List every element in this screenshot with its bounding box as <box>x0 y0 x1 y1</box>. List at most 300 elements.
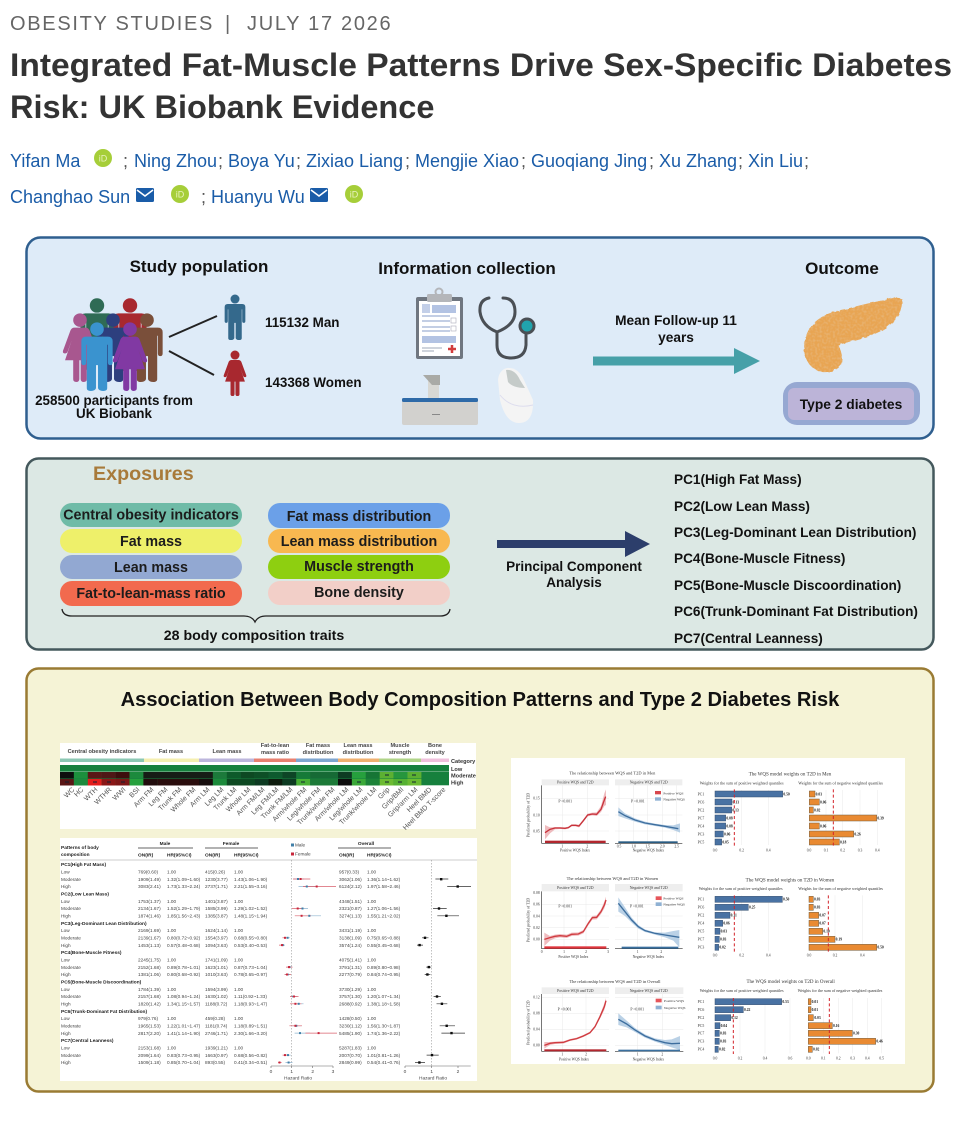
table rows: 0.55(0.45~0.68) <box>367 943 401 948</box>
table rows: 2152(1.68) <box>138 965 161 970</box>
table rows: 1939(1.21) <box>205 1046 228 1050</box>
table rows: PC4(Bone-Muscle Fitness) <box>61 950 122 956</box>
heatmap group headers: Lean mass <box>344 743 372 749</box>
chart: WQS curves in women: 2 <box>660 950 662 954</box>
follow-up label: Mean Follow-up 11 <box>615 313 737 328</box>
chart: WQS curves in men: 2.5 <box>674 844 679 848</box>
chart: weights in men: PC2 <box>698 808 704 812</box>
table rows: 1509(1.18) <box>138 1060 161 1065</box>
table rows: 2134(1.67) <box>138 906 161 911</box>
table header: HR(95%CI) <box>367 852 392 858</box>
heatmap column labels: Trunk FM/LM <box>260 786 295 821</box>
chart: weights overall: Weights for the sum of positive weighted quantiles <box>700 988 784 993</box>
heading: study population: Study population <box>130 257 268 276</box>
table rows: 1.00 <box>167 987 177 992</box>
chart: weights in women: 0.25 <box>749 906 756 910</box>
chart: weights overall: 0.04 <box>721 1024 727 1028</box>
authors: Xin Liu <box>748 151 803 171</box>
principal component list: PC1(High Fat Mass) <box>674 472 802 487</box>
chart: weights overall: 0.01 <box>812 1000 818 1004</box>
pills: left column <box>60 503 242 606</box>
chart: WQS curves in women: Positive WQS <box>663 897 683 901</box>
heatmap group headers: distribution <box>343 750 374 756</box>
table rows: 0.80(0.68~0.92) <box>167 972 201 977</box>
table rows: 1965(1.53) <box>138 1024 161 1028</box>
table rows: 1.00 <box>367 870 377 874</box>
table rows: 1.00 <box>167 958 177 962</box>
chart: WQS curves in women: Positive WQS and T2D <box>557 886 594 890</box>
chart: weights in men: 0.13 <box>733 800 739 804</box>
chart: weights in men: Weights for the sum of negative weighted quantiles <box>798 781 883 786</box>
participants label <box>35 393 193 421</box>
authors: Boya Yu <box>228 151 295 171</box>
chart: WQS curves in women: The relationship between WQS and T2D in Women <box>567 876 659 881</box>
table rows: 1784(1.39) <box>138 987 161 992</box>
table rows: 2.30(1.66~3.20) <box>234 1031 268 1036</box>
table rows: 1.74(1.36~2.22) <box>367 1031 401 1036</box>
chart: WQS curves in men: 0.15 <box>533 797 540 801</box>
chart: weights in men: 0.18 <box>840 840 847 844</box>
table rows: 2746(1.71) <box>205 1031 228 1036</box>
chart: weights in men: PC6 <box>698 800 704 804</box>
heatmap cells: ** <box>385 774 389 780</box>
chart: WQS curves in women: 0.06 <box>533 903 540 907</box>
journal line: OBESITY STUDIES <box>10 13 214 35</box>
chart: WQS curves overall: 0.12 <box>533 996 540 1000</box>
pills: right column: Lean mass distribution <box>281 534 437 550</box>
heatmap column labels: Grip/BMI <box>381 786 405 811</box>
chart: weights in women: 0.03 <box>814 898 821 902</box>
chart: WQS curves in women: P <0.001 <box>558 904 572 908</box>
table rows: 1623(1.01) <box>205 965 228 970</box>
table rows: Low <box>61 899 70 904</box>
chart: weights overall: PC5 <box>698 1024 704 1028</box>
heatmap group headers: distribution <box>303 750 334 756</box>
icon: clipboard <box>416 288 463 359</box>
table rows: 0.54(0.41~0.76) <box>367 1060 401 1065</box>
chart: weights in men: 0.06 <box>820 824 827 828</box>
chart: weights in women: PC4 <box>698 922 704 926</box>
chart: weights overall: 0.53 <box>782 1000 789 1004</box>
heatmap column labels: Leg/whole LM <box>329 786 365 822</box>
authors: Ning Zhou <box>134 151 217 171</box>
heatmap <box>60 743 476 832</box>
table rows: 0.87(0.73~1.04) <box>234 965 268 970</box>
chart: WQS curves in men: P <0.001 <box>558 800 572 804</box>
table rows: 1.00 <box>234 870 244 874</box>
chart: WQS curves in men: 1.0 <box>631 844 636 848</box>
table rows: 1630(1.02) <box>205 994 228 999</box>
table rows: 1554(3.97) <box>205 936 228 940</box>
chart: weights in men: 0.06 <box>820 800 827 804</box>
table rows: 5485(1.90) <box>339 1031 362 1036</box>
heatmap column labels: Arm FM/LM <box>236 786 267 817</box>
men count: 115132 Man <box>265 315 339 330</box>
chart: weights in women: 0.50 <box>783 898 790 902</box>
authors: Guoqiang Jing <box>531 151 647 171</box>
chart: WQS curves in women: 0.08 <box>533 891 540 895</box>
chart: weights in women: 0.11 <box>731 914 737 918</box>
chart: weights in women: 0.07 <box>819 914 826 918</box>
chart: weights overall: The WQS model weights on T2D in Overall <box>747 980 835 985</box>
table rows: High <box>61 1031 71 1036</box>
outcome box <box>783 382 920 425</box>
table rows <box>61 862 401 1065</box>
table rows: 1.11(0.92~1.33) <box>234 994 267 999</box>
chart: weights in women: 0.03 <box>814 906 821 910</box>
chart: weights in women: Weights for the sum of negative weighted quantiles <box>798 886 883 891</box>
table rows: 1820(1.42) <box>138 1002 161 1006</box>
title: Integrated Fat-Muscle Patterns Drive Sex-Specific Diabetes <box>10 47 952 83</box>
table rows: 2157(1.68) <box>138 994 161 999</box>
chart: WQS curves in men: 0.10 <box>533 813 540 817</box>
chart: weights in men: 0.0 <box>807 848 811 852</box>
table header: ON(IR) <box>138 852 154 858</box>
panel: study design <box>26 238 934 438</box>
table rows: 1.00 <box>234 958 244 962</box>
table rows: Moderate <box>61 965 81 970</box>
pills: right column: Bone density <box>314 585 404 601</box>
table rows: 4075(1.41) <box>339 958 362 962</box>
table rows: 1.32(1.09~1.60) <box>167 877 201 882</box>
row: overall <box>527 979 884 1061</box>
chart: weights overall: 0.30 <box>853 1032 860 1036</box>
authors: ; <box>296 151 301 171</box>
table rows: 1.00 <box>234 1016 244 1021</box>
chart: weights overall: 0.03 <box>814 1016 821 1020</box>
heatmap column labels <box>63 786 447 832</box>
chart: WQS curves overall <box>527 979 686 1061</box>
table rows: Moderate <box>61 877 81 882</box>
heatmap column labels: Leg FM <box>148 786 170 808</box>
pills: left column: Fat mass <box>120 534 182 550</box>
table rows: 1.55(1.21~2.02) <box>367 914 401 918</box>
chart: weights in men: 0.05 <box>722 840 729 844</box>
table rows: 1741(1.09) <box>205 958 228 962</box>
table rows: 3730(1.29) <box>339 987 362 992</box>
principal component list <box>674 472 918 646</box>
table rows: 1.00 <box>234 899 244 904</box>
chart: WQS curves overall: 2 <box>585 1052 587 1056</box>
table rows: High <box>61 972 71 977</box>
chart: weights in women: PC3 <box>698 946 704 950</box>
chart: WQS curves overall: Negative WQS and T2D <box>630 989 668 993</box>
table rows: 2.21(1.55~3.16) <box>234 884 268 889</box>
heatmap column labels: Trunk/whole LM <box>338 786 379 826</box>
table rows: 1874(1.46) <box>138 914 161 918</box>
panel: association <box>26 668 934 1092</box>
chart: WQS curves overall: Negative WQS <box>664 1006 686 1010</box>
table rows: 1594(3.99) <box>205 987 228 992</box>
authors: ; <box>405 151 410 171</box>
chart: weights in women: 0.06 <box>723 922 730 926</box>
chart: weights in women: 0.4 <box>860 954 865 958</box>
chart: weights in men: 0.26 <box>854 832 861 836</box>
table rows: High <box>61 1002 71 1006</box>
table rows: 1.18(0.93~1.47) <box>234 1002 268 1006</box>
table rows: 2169(1.69) <box>138 928 161 933</box>
arrow: follow-up <box>593 348 760 374</box>
table rows: 1.00 <box>234 1046 244 1050</box>
forest plot: male and female: 3 <box>332 1069 335 1075</box>
principal component list: PC2(Low Lean Mass) <box>674 499 810 514</box>
chart: weights in men: 0.08 <box>726 824 733 828</box>
table rows: 1.00 <box>367 928 377 933</box>
table rows: 459(0.28) <box>205 1016 226 1021</box>
icon: pancreas <box>804 298 902 372</box>
table rows: 1.00 <box>367 987 377 992</box>
table rows: Low <box>61 928 70 933</box>
chart: WQS curves in women: Negative WQS <box>663 903 685 907</box>
table header: Male <box>160 841 171 847</box>
pills: right column: Fat mass distribution <box>287 509 431 525</box>
chart: weights in women: 0.2 <box>739 954 744 958</box>
table rows: 2321(0.87) <box>339 906 362 911</box>
chart: weights in men: 0.50 <box>783 792 790 796</box>
chart: WQS curves in women: 1 <box>637 950 639 954</box>
traits label: 28 body composition traits <box>164 628 344 644</box>
chart: WQS curves in men: 2 <box>586 844 588 848</box>
chart: weights in women: 0.03 <box>721 930 727 934</box>
forest plot table <box>60 838 477 1082</box>
table rows: 1401(3.87) <box>205 899 228 904</box>
table rows: 2153(1.68) <box>138 1046 161 1050</box>
authors: Mengjie Xiao <box>415 151 519 171</box>
chart: weights overall: PC3 <box>698 1040 704 1044</box>
table rows: High <box>61 943 71 948</box>
chart: WQS curves in women: 1 <box>563 950 565 954</box>
follow-up label <box>615 313 737 345</box>
chart: weights overall: PC6 <box>698 1008 704 1012</box>
table rows: 0.89(0.78~1.01) <box>167 965 201 970</box>
forest plot: male and female <box>270 860 337 1082</box>
forest plot: overall: Hazard Ratio <box>419 1076 447 1082</box>
forest plot: male and female: 2 <box>311 1069 314 1075</box>
icon: heel scanner <box>498 368 533 423</box>
forest plot: male and female: Hazard Ratio <box>284 1076 312 1082</box>
PCA label <box>506 559 642 590</box>
heatmap row labels <box>451 759 476 786</box>
chart: weights in men: 0.03 <box>816 792 822 796</box>
pills: left column: Lean mass <box>114 560 188 576</box>
table rows: 957(0.33) <box>339 870 360 874</box>
table rows: Low <box>61 870 70 874</box>
table rows: 3274(1.13) <box>339 914 362 918</box>
outcome box: Type 2 diabetes <box>800 397 903 412</box>
heatmap cells <box>60 765 449 787</box>
table rows: 0.41(0.34~0.51) <box>234 1060 268 1065</box>
table rows: 3791(1.31) <box>339 965 362 970</box>
chart: weights in men: The WQS model weights on T2D in Men <box>749 772 832 777</box>
chart: WQS curves overall: 1 <box>637 1052 639 1056</box>
principal component list: PC7(Central Leanness) <box>674 631 823 646</box>
chart: WQS curves in men: 0.05 <box>533 829 540 833</box>
heatmap column labels: Whole LM <box>225 786 253 814</box>
chart: WQS curves in men: Positive WQS <box>663 791 683 795</box>
PCA label: Analysis <box>546 575 602 590</box>
table rows: 3431(1.19) <box>339 928 362 933</box>
table header: composition <box>61 852 90 858</box>
chart: weights in women: 0.2 <box>833 954 837 958</box>
table rows: 1.18(0.89~1.51) <box>234 1024 268 1028</box>
authors: ; <box>804 151 809 171</box>
table rows: PC2(Low Lean Mass) <box>61 892 109 898</box>
table rows: 1.22(1.01~1.47) <box>167 1024 201 1028</box>
table rows: 0.80(0.72~0.92) <box>167 936 201 940</box>
chart: WQS curves in women: P <0.001 <box>630 904 644 908</box>
icon: mail <box>136 188 154 202</box>
heatmap column labels: WC <box>63 786 76 800</box>
chart: WQS curves in men: 1 <box>561 844 563 848</box>
table header <box>60 841 477 860</box>
table header: Female <box>223 841 240 847</box>
chart: weights in men: 0.13 <box>732 808 739 812</box>
table rows: 1.01(0.81~1.26) <box>367 1053 401 1058</box>
principal component list: PC3(Leg-Dominant Lean Distribution) <box>674 525 916 540</box>
chart: weights overall: 0.4 <box>763 1056 767 1060</box>
heatmap column labels: Trunk FM <box>157 786 184 812</box>
table rows: 3230(1.12) <box>339 1024 362 1028</box>
chart: weights in women: PC1 <box>698 898 704 902</box>
chart: weights in women: 0.0 <box>713 954 717 958</box>
heatmap group headers: density <box>425 750 446 756</box>
chart: WQS curves in men: Negative WQS <box>663 798 685 802</box>
table rows: Moderate <box>61 1024 81 1028</box>
chart: WQS curves overall: Positive WQS <box>664 999 684 1003</box>
table rows: 1663(0.97) <box>205 1053 228 1058</box>
table rows: 1.36(1.14~1.62) <box>367 877 401 882</box>
icon: crowd of people <box>63 298 163 391</box>
PCA label: Principal Component <box>506 559 642 574</box>
table rows: 1.34(1.15~1.57) <box>167 1002 201 1006</box>
chart: WQS curves in men: 2.0 <box>660 844 665 848</box>
authors: Huanyu Wu <box>211 187 305 207</box>
table rows: 769(0.60) <box>138 870 159 874</box>
participants label: UK Biobank <box>76 406 152 421</box>
table rows: 3574(1.24) <box>339 943 362 948</box>
table header: HR(95%CI) <box>234 852 259 858</box>
icon: stethoscope <box>480 298 534 358</box>
table rows: 5287(1.83) <box>339 1046 362 1050</box>
table rows: PC1(High Fat Mass) <box>61 862 106 868</box>
table rows: 2737(1.71) <box>205 884 228 889</box>
chart: weights overall <box>698 980 884 1060</box>
table rows: 1094(3.63) <box>205 943 228 948</box>
heatmap cells: ** <box>412 774 416 780</box>
table rows: 1.20(1.07~1.34) <box>367 994 401 999</box>
chart: weights in women: The WQS model weights on T2D in Women <box>746 878 835 883</box>
chart: weights overall: PC1 <box>698 1000 704 1004</box>
heatmap cells: ** <box>107 781 111 787</box>
icon: ORCID <box>345 185 363 203</box>
heatmap cells: ** <box>121 781 125 787</box>
table rows: 1.73(1.33~2.24) <box>167 884 201 889</box>
heatmap column labels: Arm LM <box>189 786 212 809</box>
heatmap row labels: Category <box>451 759 476 765</box>
table rows: 3138(1.09) <box>339 936 362 940</box>
title <box>10 47 952 125</box>
authors: Yifan Ma <box>10 151 81 171</box>
chart: WQS curves in men: The relationship between WQS and T2D in Men <box>569 771 656 776</box>
principal component list: PC5(Bone-Muscle Discoordination) <box>674 578 901 593</box>
chart: weights in men: 0.02 <box>814 808 821 812</box>
table rows: 1.00 <box>367 899 377 904</box>
table rows: 1.08(0.94~1.24) <box>167 994 201 999</box>
chart: WQS curves overall: P <0.001 <box>630 1007 644 1011</box>
chart: WQS curves in men: Negative WQS Index <box>633 849 664 853</box>
table rows: 1188(0.72) <box>205 1002 228 1006</box>
chart: weights in men <box>698 772 884 852</box>
table rows: Moderate <box>61 994 81 999</box>
chart: weights in women: 0.4 <box>766 954 771 958</box>
table rows: 2817(2.20) <box>138 1031 161 1036</box>
chart: weights overall: Weights for the sum of negative weighted quantiles <box>798 988 883 993</box>
women count: 143368 Women <box>265 375 362 390</box>
chart: weights in men: 0.06 <box>724 832 731 836</box>
table rows: 1.00 <box>367 1016 377 1021</box>
table header: Overall <box>358 841 374 847</box>
icon: ORCID: iD <box>176 190 185 200</box>
chart: weights in women: 0.50 <box>877 946 884 950</box>
table rows: 1753(1.37) <box>138 899 161 904</box>
pills: right column: Muscle strength <box>304 559 414 575</box>
table rows: 1181(0.74) <box>205 1024 228 1028</box>
chart: weights in women: PC5 <box>698 930 704 934</box>
chart: weights in men: 0.2 <box>840 848 845 852</box>
heatmap cells: ** <box>412 781 416 787</box>
chart: weights in men: 0.0 <box>713 848 717 852</box>
table rows: 2245(1.75) <box>138 958 161 962</box>
table rows: High <box>61 884 71 889</box>
heatmap column labels: Whole FM <box>170 786 198 814</box>
table rows: 1585(3.99) <box>205 906 228 911</box>
table rows: 3083(2.41) <box>138 884 161 889</box>
chart: weights overall: PC4 <box>698 1048 704 1052</box>
table rows: 2688(0.92) <box>339 1002 362 1006</box>
icon: ORCID: iD <box>99 154 108 164</box>
chart: weights overall: 0.1 <box>821 1056 826 1060</box>
table rows: Low <box>61 1046 70 1050</box>
chart: WQS curves in men: Positive WQS and T2D <box>557 781 594 785</box>
chart: weights in men: PC4 <box>698 824 704 828</box>
chart: weights overall: 0.5 <box>879 1056 884 1060</box>
heatmap group headers: mass ratio <box>261 750 290 756</box>
table rows: 1909(1.49) <box>138 877 161 882</box>
journal line: | <box>225 13 232 35</box>
principal component list: PC6(Trunk-Dominant Fat Distribution) <box>674 604 918 619</box>
authors: ; <box>649 151 654 171</box>
arrow: PCA <box>497 531 650 557</box>
chart: weights overall: 0.0 <box>806 1056 811 1060</box>
table rows: 0.75(0.65~0.88) <box>367 936 401 940</box>
table header: ON(IR) <box>339 852 355 858</box>
table rows: 0.57(0.48~0.68) <box>167 943 201 948</box>
principal component list: PC4(Bone-Muscle Fitness) <box>674 551 845 566</box>
table rows: 0.84(0.74~0.95) <box>367 972 401 977</box>
chart: weights in women: 0.0 <box>807 954 811 958</box>
table rows: 3757(1.30) <box>339 994 362 999</box>
chart: weights in women: 0.02 <box>719 946 726 950</box>
table rows: 1381(1.06) <box>138 972 161 977</box>
WQS results block <box>511 758 905 1064</box>
chart: weights in women: 0.03 <box>720 938 727 942</box>
heatmap column labels: Leg/whole FM <box>286 786 323 823</box>
chart: WQS curves overall: 2 <box>661 1052 663 1056</box>
heatmap column labels: Arm/whole FM <box>272 786 309 823</box>
chart: WQS curves in women: 0.00 <box>533 938 540 942</box>
chart: weights in men: PC3 <box>698 832 704 836</box>
chart: WQS curves in men: Predicted probability of T2D <box>527 793 531 837</box>
